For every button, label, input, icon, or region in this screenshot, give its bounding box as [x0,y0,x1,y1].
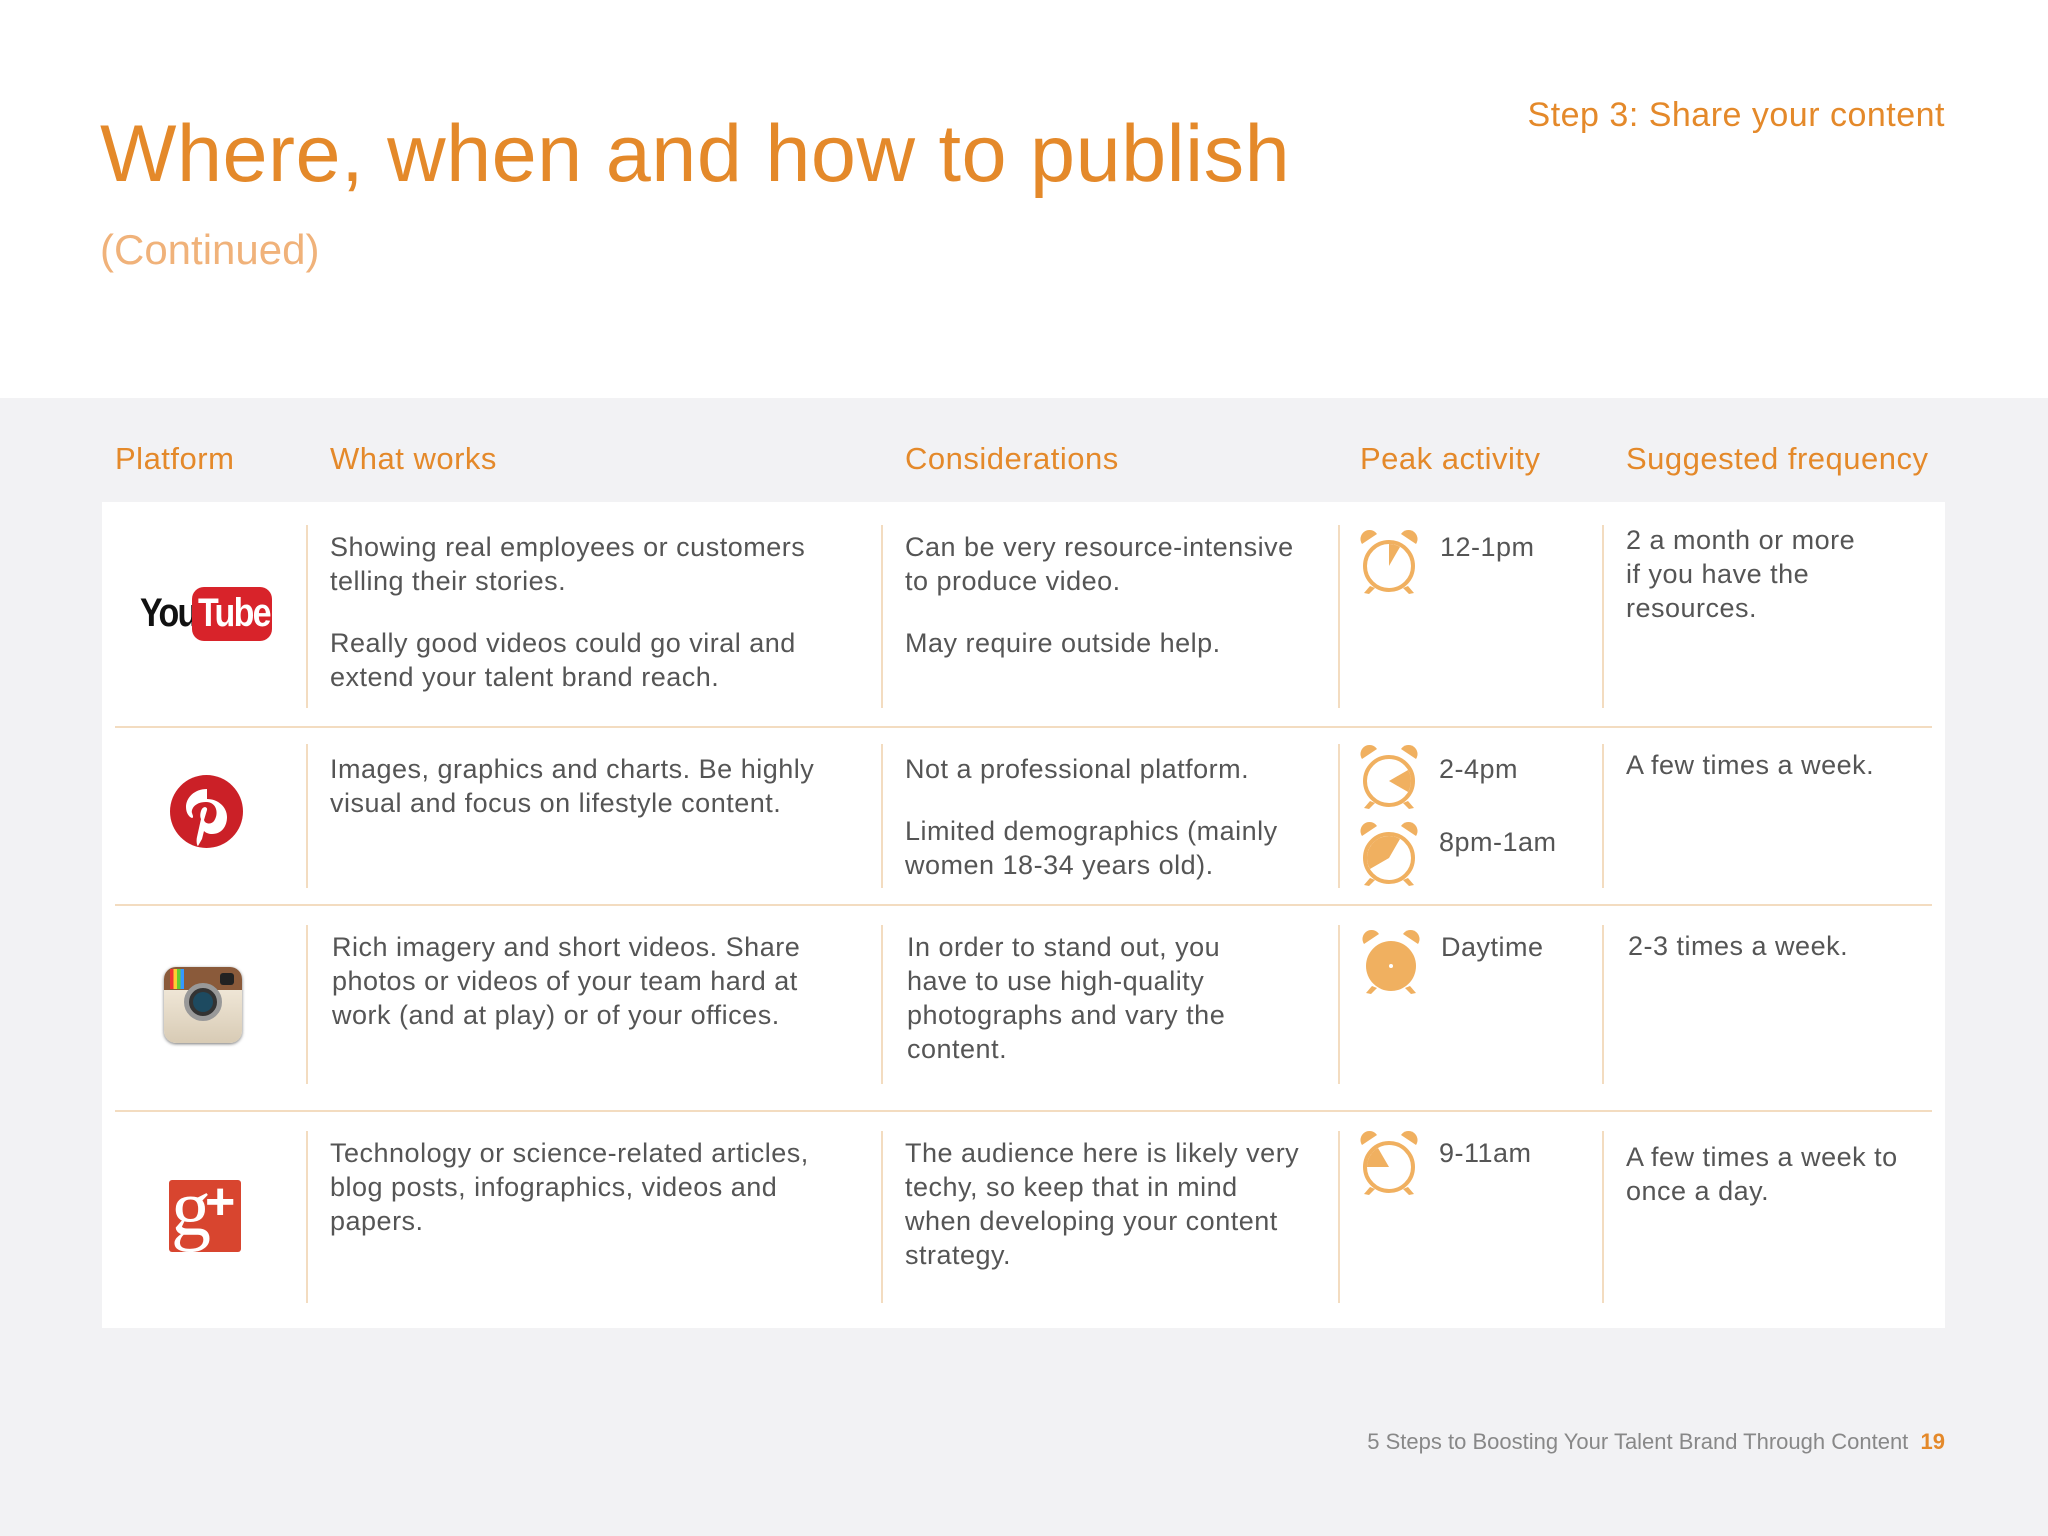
row 3 text [332,932,800,1030]
row 2 text: visual and focus on lifestyle content. [330,788,781,818]
icon: google plus [169,1180,241,1252]
text: if you have the [1626,559,1809,589]
row 4 text: blog posts, infographics, videos and [330,1172,777,1202]
table headers: Considerations [905,441,1119,476]
text: strategy. [905,1240,1011,1270]
text: 12-1pm [1440,532,1535,562]
subtitle: (Continued) [100,226,319,273]
text: 9-11am [1439,1138,1532,1168]
text: photographs and vary the [907,1000,1225,1030]
table headers: Suggested frequency [1626,441,1928,476]
row 2 text: Images, graphics and charts. Be highly [330,754,814,784]
step label: Step 3: Share your content [1528,96,1945,134]
text: In order to stand out, you [907,932,1220,962]
text: A few times a week to [1626,1142,1898,1172]
text: when developing your content [905,1206,1278,1236]
text: once a day. [1626,1176,1769,1206]
text: Daytime [1441,932,1544,962]
row 1 text: Showing real employees or customers [330,532,805,562]
text: 2 a month or more [1626,525,1855,555]
clock 2-4pm [1360,745,1418,809]
footer: 5 Steps to Boosting Your Talent Brand Through Content 19 [1367,1429,1945,1454]
text: Can be very resource-intensive [905,532,1294,562]
row 1 text [330,532,805,692]
row 3 text: work (and at play) or of your offices. [332,1000,780,1030]
text: women 18-34 years old). [905,850,1214,880]
row 4 text: Technology or science-related articles, [330,1138,809,1168]
table headers: Platform [115,441,234,476]
row 4 text: papers. [330,1206,424,1236]
row 3 text: photos or videos of your team hard at [332,966,798,996]
table headers [115,441,1928,476]
table headers: What works [330,441,497,476]
text: content. [907,1034,1007,1064]
icon: pinterest [170,775,243,848]
text: Not a professional platform. Limited demographics (mainly [905,754,1278,846]
text: resources. [1626,593,1757,623]
icon: youtube [140,587,272,641]
row 3 text: Rich imagery and short videos. Share [332,932,800,962]
text: 8pm-1am [1439,827,1557,857]
text: to produce video. May require outside help. [905,566,1221,658]
text: 2-3 times a week. [1628,931,1848,961]
text: techy, so keep that in mind [905,1172,1238,1202]
icon: instagram [164,967,242,1043]
text: A few times a week. [1626,750,1874,780]
text: The audience here is likely very [905,1138,1299,1168]
clock 8pm-1am [1360,822,1418,886]
panel: table [102,502,1945,1328]
row 1 text: extend your talent brand reach. [330,662,719,692]
row 1 text: telling their stories. Really good videos could go viral and [330,566,796,658]
clock daytime [1362,930,1420,994]
header area [0,0,2048,398]
text: have to use high-quality [907,966,1204,996]
row 4 text [330,1138,809,1236]
table headers: Peak activity [1360,441,1541,476]
title: Where, when and how to publish [100,109,1290,199]
icon: youtube: You [140,591,197,635]
icon: youtube: Tube [198,591,270,635]
row 2 text [330,754,814,818]
text: 2-4pm [1439,754,1518,784]
clock 12-1pm [1360,530,1418,594]
clock 9-11am [1360,1131,1418,1195]
